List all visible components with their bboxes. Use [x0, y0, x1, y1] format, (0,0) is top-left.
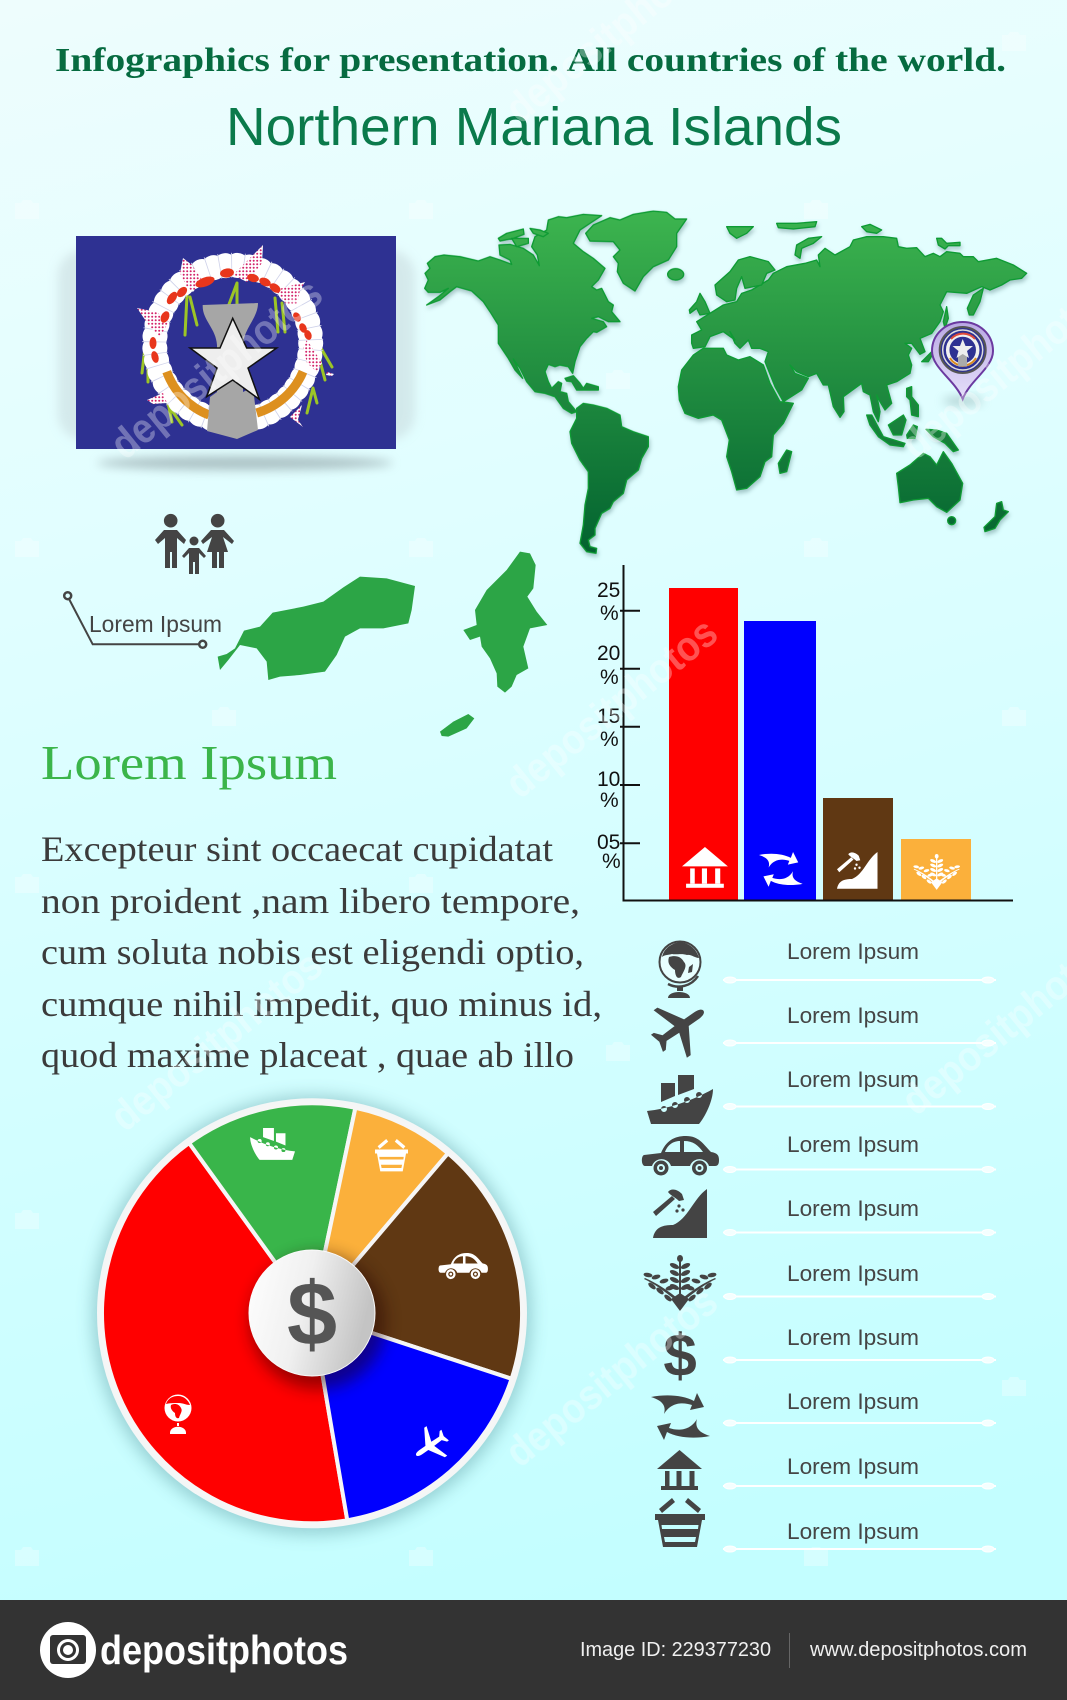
icon: plane on blue slice — [406, 1420, 455, 1470]
islands map — [218, 552, 547, 737]
axis labels: % — [600, 666, 619, 689]
borneo — [888, 415, 906, 435]
icon: ship — [647, 1075, 713, 1124]
wreath red buds — [150, 268, 313, 364]
callout with leader line — [64, 592, 222, 648]
axis labels: % — [600, 789, 619, 812]
axis labels: % — [602, 850, 621, 873]
madagascar — [778, 450, 792, 473]
footer url: www.depositphotos.com — [809, 1639, 1027, 1661]
axis labels — [597, 579, 621, 873]
map location pin — [932, 322, 993, 405]
center disc: $ — [287, 1265, 337, 1365]
icon: globe — [660, 942, 700, 998]
slice: brown — [312, 1153, 522, 1379]
icon: car — [642, 1136, 719, 1176]
icon: plane — [640, 987, 720, 1067]
slice: red — [102, 1143, 347, 1523]
icon: car on brown slice — [439, 1253, 488, 1279]
slice: green — [189, 1103, 355, 1313]
footer logo icon — [40, 1622, 96, 1678]
watermark text: depositphotos — [496, 608, 726, 807]
new guinea — [926, 429, 958, 452]
paragraph: cumque nihil impedit, quo minus id, — [41, 984, 602, 1024]
footer bar — [0, 1600, 1067, 1700]
philippines — [907, 387, 918, 417]
callout with leader line: Lorem Ipsum — [89, 611, 222, 637]
axis labels: 25 — [597, 579, 620, 602]
arctic russia islands — [727, 222, 960, 258]
icon: wheat on orange bar — [913, 854, 960, 890]
flag star — [190, 318, 277, 399]
legend rules — [723, 977, 996, 1552]
paragraph — [41, 829, 602, 1075]
new zealand — [984, 502, 1008, 532]
legend labels: Lorem Ipsum — [787, 1325, 919, 1350]
center disc — [249, 1250, 386, 1389]
paragraph: quod maxime placeat , quae ab illo — [41, 1035, 574, 1075]
iceland — [668, 269, 684, 280]
north america — [425, 214, 620, 413]
icon: basket — [655, 1498, 705, 1547]
title: Infographics for presentation. All countries of the world. — [55, 42, 1006, 79]
axis labels: 15 — [597, 705, 620, 728]
country name heading: Northern Mariana Islands — [226, 97, 842, 157]
eurasia group — [689, 222, 1027, 422]
bar: red — [669, 588, 738, 900]
paragraph: cum soluta nobis est eligendi optio, — [41, 932, 584, 972]
wreath leaves — [142, 283, 332, 425]
legend labels: Lorem Ipsum — [787, 939, 919, 964]
africa — [678, 348, 793, 490]
icon: ship on green slice — [250, 1128, 295, 1160]
south america — [570, 403, 648, 553]
slice: orange — [312, 1108, 448, 1313]
icon: basket on orange slice — [375, 1139, 408, 1171]
flag wreath — [137, 245, 334, 427]
icon: arrows on blue bar — [759, 852, 803, 887]
icon: globe on red slice — [164, 1394, 192, 1433]
australia — [897, 452, 963, 512]
legend labels: Lorem Ipsum — [787, 1261, 919, 1286]
bar: blue — [744, 621, 816, 900]
axis labels: 05 — [597, 831, 620, 854]
legend labels — [787, 939, 919, 1544]
icon: bank on red bar — [682, 847, 728, 888]
caribbean — [565, 376, 598, 390]
axis labels: % — [600, 728, 619, 751]
watermark text: depositphotos — [101, 941, 331, 1140]
watermark text: depositphotos — [101, 269, 331, 468]
legend labels: Lorem Ipsum — [787, 1132, 919, 1157]
tasmania — [948, 517, 956, 525]
icon: mine on brown bar — [837, 852, 878, 889]
bar chart — [597, 565, 1013, 900]
paragraph: non proident ,nam libero tempore, — [41, 881, 580, 921]
bar: brown — [823, 798, 893, 900]
legend labels: Lorem Ipsum — [787, 1067, 919, 1092]
slice: blue — [312, 1313, 512, 1520]
axis labels: 10 — [597, 768, 620, 791]
legend list — [640, 939, 996, 1552]
flag — [58, 236, 415, 470]
icon: mine — [653, 1189, 707, 1238]
watermark text: depositphotos — [496, 1277, 726, 1476]
kamchatka and sakhalin — [922, 288, 983, 362]
legend labels: Lorem Ipsum — [787, 1196, 919, 1221]
britain — [689, 293, 710, 315]
legend labels: Lorem Ipsum — [787, 1454, 919, 1479]
legend labels: Lorem Ipsum — [787, 1003, 919, 1028]
icon: wheat — [643, 1255, 717, 1311]
legend labels: Lorem Ipsum — [787, 1519, 919, 1544]
axis labels: 20 — [597, 642, 620, 665]
bar: orange — [901, 839, 971, 900]
greenland — [586, 211, 687, 291]
pie chart — [92, 1095, 532, 1535]
flag latte stone — [203, 303, 258, 439]
africa and oceania — [678, 348, 1008, 532]
image id: Image ID: 229377230 — [580, 1639, 771, 1661]
world map — [425, 211, 1027, 553]
americas — [425, 211, 687, 553]
chart axes — [620, 565, 1013, 900]
scandinavia — [715, 257, 775, 302]
paragraph: Excepteur sint occaecat cupidatat — [41, 829, 553, 869]
family icon — [155, 514, 234, 574]
watermark text — [101, 0, 1067, 1476]
sumatra and java — [867, 415, 905, 447]
footer logo text: depositphotos — [100, 1627, 348, 1673]
wreath pink flowers — [137, 245, 334, 427]
icon: dollar: $ — [663, 1322, 697, 1389]
sulawesi — [907, 425, 917, 438]
section heading: Lorem Ipsum — [41, 735, 337, 790]
icon: bank — [657, 1450, 702, 1490]
icon: exchange arrows — [651, 1393, 710, 1440]
legend labels: Lorem Ipsum — [787, 1389, 919, 1414]
eurasia — [692, 237, 1027, 422]
axis labels: % — [600, 602, 619, 625]
arctic islands — [498, 228, 548, 247]
